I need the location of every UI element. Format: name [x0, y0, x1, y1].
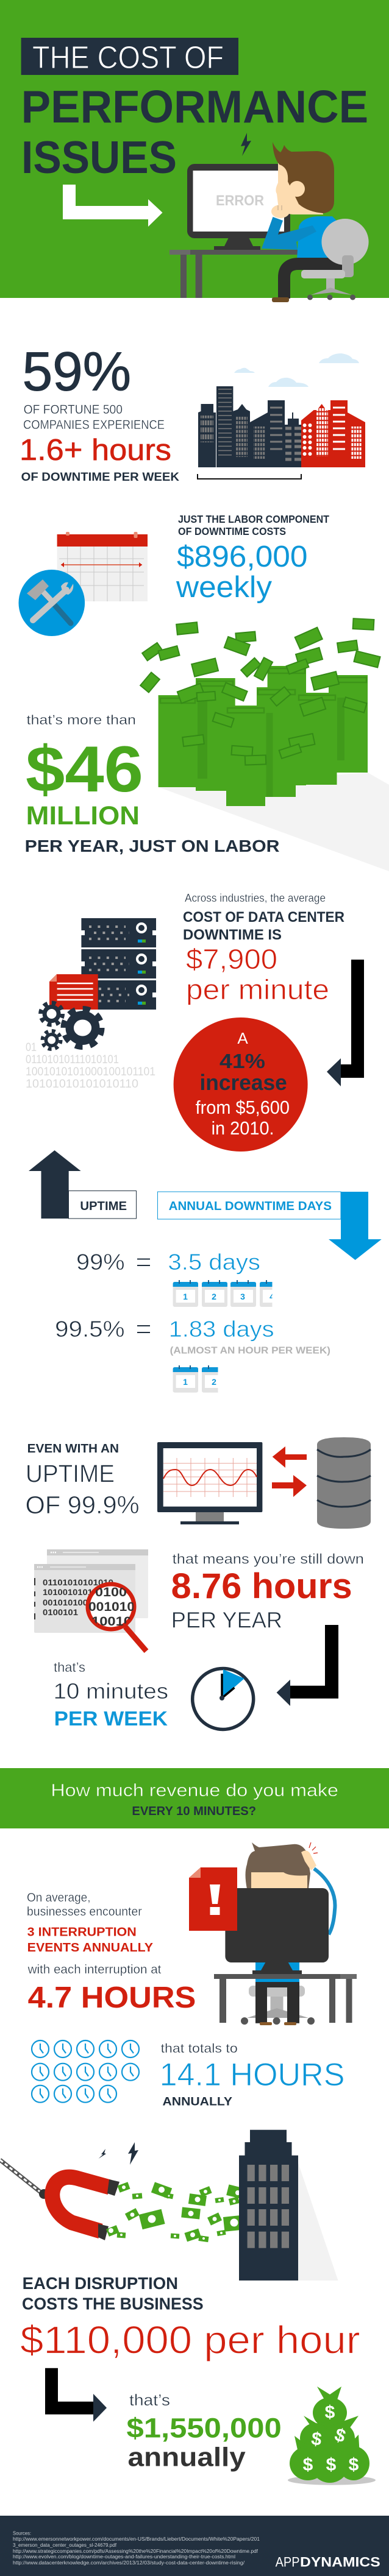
- illustration: magnet pulling money: [0, 2142, 246, 2242]
- icon: red document: [49, 974, 98, 1010]
- stat: 8.76 hours: 8.76 hours: [171, 1566, 352, 1606]
- callout: 41% increase: from $5,600: [196, 1097, 290, 1118]
- arrow: black elbow left: [327, 960, 364, 1086]
- logo: appdynamics: APP: [276, 2555, 300, 2570]
- icon: code windows with magnifier: 01101010101010: [43, 1577, 113, 1587]
- lightning bolts: [99, 2142, 138, 2165]
- text: that's: that’s: [54, 1660, 85, 1675]
- illustration: person at computer: [170, 142, 369, 302]
- text: that's more than: that’s more than: [27, 712, 136, 727]
- chair and legs: [241, 1982, 315, 2025]
- panel: header: [0, 0, 389, 302]
- text: companies experience: COMPANIES EXPERIENCE: [23, 418, 165, 432]
- text: binary code: 1001010101000100101101: [26, 1066, 155, 1078]
- clouds: [234, 353, 359, 387]
- icon: money bags: [288, 2387, 376, 2485]
- icon: code windows with magnifier: 10010: [91, 1615, 132, 1629]
- text: each disruption: EACH DISRUPTION: [23, 2274, 178, 2293]
- panel: annual labor cost: [25, 618, 389, 871]
- text: across industries: Across industries, the average: [185, 892, 326, 904]
- monitor: ERROR: [216, 193, 264, 209]
- icon: code windows with magnifier: 001010: [88, 1600, 135, 1614]
- bracket: [198, 474, 301, 479]
- icon: code windows with magnifier: 001010100: [43, 1598, 88, 1607]
- desk: [170, 250, 298, 298]
- text: sources: http://www.datacenterknowledge.com/archives/2013/12/03/study-cost-data-center-downtime-rising/: [13, 2560, 245, 2566]
- text: binary code: 01: [26, 1041, 37, 1054]
- text: of fortune 500: OF FORTUNE 500: [24, 403, 123, 417]
- icon: tools circle: [19, 570, 85, 636]
- title: issues: ISSUES: [21, 132, 177, 183]
- panel: labor cost: [19, 513, 329, 636]
- flying bills: [140, 618, 380, 765]
- callout: 41% increase: A: [237, 1029, 248, 1047]
- panel: footer: [0, 2516, 389, 2576]
- text: costs the business: COSTS THE BUSINESS: [22, 2295, 204, 2313]
- stat: annually: annually: [128, 2443, 246, 2472]
- icon: monitor with waveform: [157, 1442, 262, 1524]
- text: that means you're still down: that means you’re still down: [173, 1551, 364, 1567]
- text: of downtime costs: OF DOWNTIME COSTS: [178, 525, 286, 537]
- icon: code windows with magnifier: 10100101010: [43, 1587, 98, 1597]
- text: binary code: 01101010111010101: [26, 1053, 119, 1066]
- red buildings: [301, 400, 365, 467]
- icon: gears: [41, 1003, 101, 1049]
- icon: money bags: $: [332, 2424, 348, 2447]
- icons: calendars 3.5 days: 4: [269, 1292, 274, 1301]
- desk: [214, 1970, 357, 2023]
- building shadow: [298, 2163, 338, 2281]
- icon: lightning bolt: [241, 133, 251, 156]
- text: of downtime per week: OF DOWNTIME PER WEEK: [21, 470, 179, 484]
- row: 99.5%: 1.83 days: [169, 1317, 274, 1342]
- text: annually: ANNUALLY: [162, 2095, 232, 2109]
- row: 99.5%: 99.5%: [55, 1317, 125, 1342]
- arrow: black elbow to clock: [277, 1625, 338, 1706]
- icon: money bags: $: [325, 2402, 335, 2422]
- stat: weekly: weekly: [176, 571, 273, 604]
- text: of 99.9%: OF 99.9%: [26, 1491, 140, 1519]
- icon: stopwatch clock: [193, 1668, 254, 1729]
- icon: code windows with magnifier: 0100101: [43, 1607, 78, 1617]
- heading: every 10 minutes: EVERY 10 MINUTES?: [132, 1805, 256, 1818]
- text: sources: 3_emerson_data_center_outages_sl-24679.pdf: [13, 2542, 117, 2548]
- stat: $1,550,000: $1,550,000: [127, 2413, 282, 2444]
- callout: 41% increase: [174, 1017, 308, 1152]
- icons: calendars 3.5 days: 1: [183, 1292, 188, 1301]
- arrow: white elbow: [63, 185, 162, 227]
- heading: how much revenue: How much revenue do you make: [51, 1781, 338, 1800]
- flying banknotes: [106, 2182, 246, 2242]
- text: cost of data center: COST OF DATA CENTER: [183, 909, 344, 925]
- icon: alert document: [189, 1867, 237, 1931]
- text: 3 interruption: 3 INTERRUPTION: [27, 1926, 137, 1939]
- icon: money bags: $: [303, 2455, 313, 2475]
- icons: clocks grid: [32, 2040, 139, 2103]
- label: uptime: [68, 1191, 137, 1219]
- title label: the cost of: THE COST OF: [32, 40, 224, 75]
- illustration: stacks of money: [140, 618, 389, 871]
- text: events annually: EVENTS ANNUALLY: [27, 1941, 154, 1955]
- text: binary code: 10101010101010110: [26, 1078, 138, 1091]
- row: 99%: 99%: [76, 1250, 125, 1275]
- label: annual downtime days: ANNUAL DOWNTIME DAYS: [169, 1200, 332, 1213]
- panel: fortune 500 stat: [20, 342, 365, 484]
- text: sources: http://www.evolven.com/blog/downtime-outages-and-failures-understanding-their-true-costs.html: [13, 2554, 235, 2560]
- icons: calendars 1.83 days: 1: [183, 1377, 188, 1387]
- text: even with an: EVEN WITH AN: [27, 1442, 119, 1456]
- stat: $896,000: $896,000: [177, 540, 307, 573]
- label: uptime: UPTIME: [80, 1200, 127, 1213]
- text: almost an hour per week: (ALMOST AN HOUR PER WEEK): [170, 1346, 330, 1356]
- icon: money bags: $: [326, 2455, 337, 2475]
- text: sources: http://www.emersonnetworkpower.com/documents/en-US/Brands/Liebert/Documents/White%20Papers/201: [13, 2536, 260, 2542]
- text: on average: On average,: [27, 1891, 90, 1905]
- stat: million: MILLION: [26, 801, 140, 830]
- logo: appdynamics: [276, 2555, 380, 2570]
- text: businesses encounter: businesses encounter: [27, 1905, 142, 1919]
- stat: 1.6+ hours: 1.6+ hours: [20, 434, 171, 467]
- panel: revenue banner: [0, 1768, 389, 1828]
- icons: calendars 3.5 days: 2: [212, 1292, 216, 1301]
- stat: $7,900: $7,900: [186, 943, 277, 975]
- text: downtime is: DOWNTIME IS: [183, 927, 282, 943]
- logo: appdynamics: DYNAMICS: [300, 2555, 380, 2570]
- arrow: downtime down: [329, 1192, 382, 1260]
- row: 99%: [76, 1250, 260, 1275]
- icon: money bags: $: [310, 2429, 323, 2450]
- panel: 99.9% uptime: [26, 1437, 371, 1730]
- stat: 59%: 59%: [23, 342, 131, 403]
- stat: 14.1 hours: 14.1 HOURS: [160, 2057, 345, 2093]
- icon: office tower: [239, 2130, 298, 2281]
- text: binary code: [26, 1041, 155, 1091]
- monitor: [187, 164, 290, 250]
- arrow: black elbow right: [45, 2368, 107, 2422]
- stat: $110,000 per hour: $110,000 per hour: [20, 2318, 360, 2362]
- panel: disruption cost: [0, 2130, 376, 2485]
- panel: data center downtime: [26, 892, 364, 1152]
- arrow: uptime up: [29, 1150, 81, 1219]
- text: sources: [13, 2531, 260, 2566]
- icon: code windows with magnifier: 0100: [95, 1585, 127, 1599]
- illustration: city skyline: [198, 353, 365, 467]
- text: 10 minutes: 10 minutes: [54, 1679, 168, 1704]
- text: sources: Sources:: [13, 2531, 31, 2536]
- stat: per minute: per minute: [186, 974, 329, 1005]
- row: 99.5%: [55, 1317, 274, 1342]
- icons: calendars 1.83 days: 2: [212, 1377, 216, 1387]
- text: uptime: UPTIME: [26, 1460, 115, 1488]
- icon: money bags: $: [349, 2455, 359, 2475]
- text: that's: that’s: [129, 2391, 170, 2409]
- text: per year, just on labor: PER YEAR, JUST ON LABOR: [25, 837, 279, 855]
- arrow: red left: [273, 1446, 307, 1468]
- icons: calendars 1.83 days: [173, 1365, 218, 1393]
- text: per year: PER YEAR: [171, 1608, 282, 1633]
- icons: calendars 3.5 days: [173, 1280, 272, 1307]
- callout: 41% increase: in 2010.: [212, 1117, 274, 1139]
- text: with each interruption at: with each interruption at: [27, 1963, 162, 1976]
- panel: interruptions: [27, 1842, 357, 2109]
- text: just the labor component: JUST THE LABOR COMPONENT: [178, 513, 329, 525]
- dark buildings: [198, 386, 301, 467]
- person: [262, 142, 342, 302]
- row: 99%: 3.5 days: [168, 1250, 260, 1275]
- icon: database: [317, 1437, 371, 1529]
- icon: server racks: [81, 918, 156, 1010]
- chair: [301, 219, 369, 300]
- icons: calendars 3.5 days: 3: [240, 1292, 245, 1301]
- arrow: red right: [272, 1475, 307, 1497]
- callout: 41% increase: 41%: [219, 1050, 265, 1072]
- stat: $46: $46: [26, 732, 143, 805]
- icon: calendar: [57, 532, 148, 601]
- title: performance: PERFORMANCE: [21, 81, 368, 132]
- label: annual downtime days: [157, 1192, 341, 1219]
- text: per week: PER WEEK: [54, 1707, 168, 1730]
- icon: code windows with magnifier: [34, 1549, 148, 1651]
- illustration: frustrated person behind monitor: [189, 1842, 357, 2025]
- stat: 4.7 hours: 4.7 HOURS: [28, 1981, 196, 2014]
- callout: 41% increase: increase: [200, 1070, 287, 1095]
- text: that totals to: that totals to: [161, 2042, 238, 2056]
- panel: uptime table: [29, 1150, 382, 1393]
- text: sources: http://www.strategiccompanies.com/pdfs/Assessing%20the%20Financial%20Impact%20of%20Downtime.pdf: [13, 2549, 259, 2554]
